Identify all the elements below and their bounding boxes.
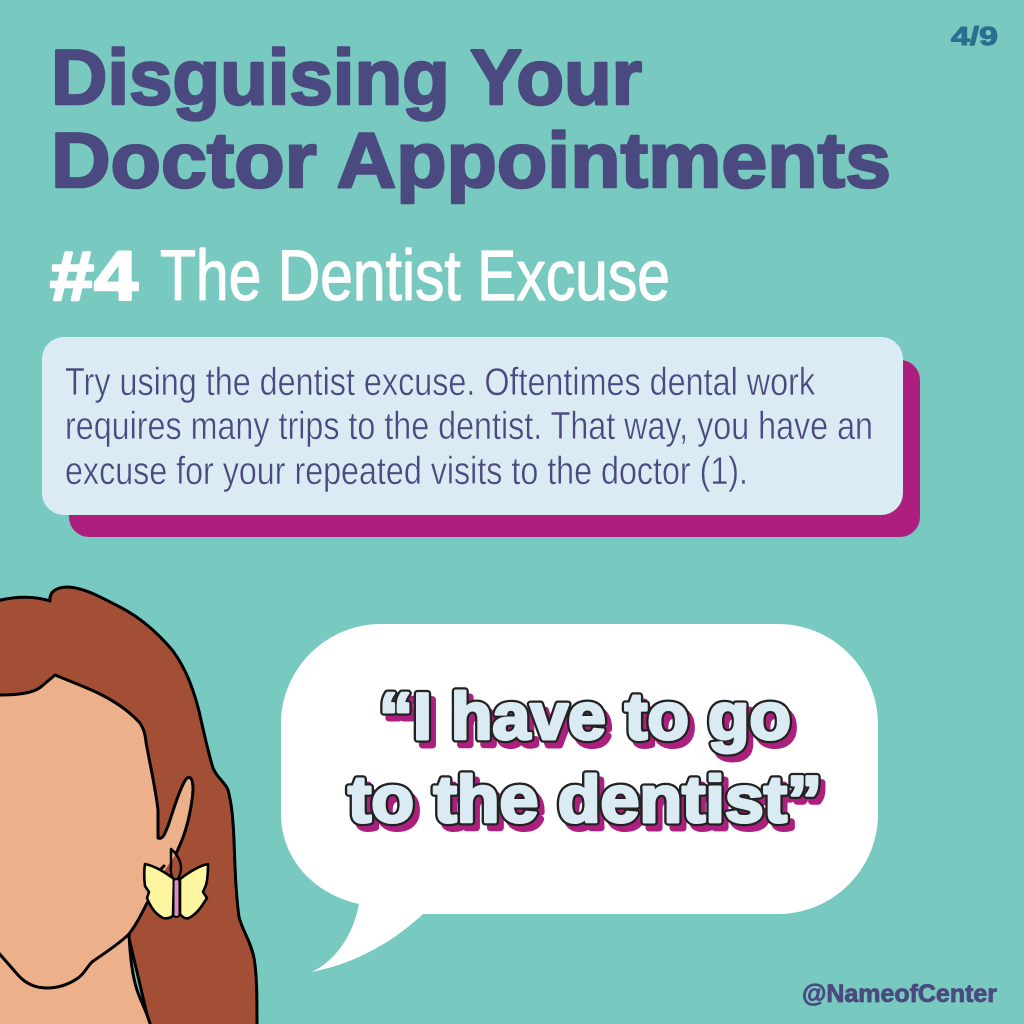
quote outline: “I have to go — [379, 679, 791, 753]
speech bubble — [281, 624, 878, 972]
quote fill — [348, 679, 822, 836]
subtitle: #4 — [50, 237, 138, 315]
hair — [0, 587, 257, 1024]
quote text — [348, 679, 827, 842]
icon: butterfly earring — [144, 849, 208, 918]
title: Doctor Appointments — [51, 116, 891, 204]
quote shadow — [353, 685, 827, 842]
inner hair line — [129, 934, 151, 1024]
quote fill: “I have to go — [379, 679, 791, 753]
quote shadow: “I have to go — [384, 685, 796, 759]
quote fill: to the dentist” — [348, 762, 822, 836]
explanation text: Try using the dentist excuse. Oftentimes dental work — [65, 361, 815, 404]
title: Disguising Your — [51, 33, 642, 121]
page number: 4/9 — [951, 21, 998, 51]
subtitle: The Dentist Excuse — [160, 237, 670, 316]
handle: @NameofCenter — [802, 980, 997, 1008]
explanation text: excuse for your repeated visits to the doctor (1). — [65, 450, 748, 493]
panel: explanation — [42, 337, 920, 537]
title — [51, 33, 891, 204]
explanation text — [65, 361, 873, 493]
quote shadow: to the dentist” — [353, 768, 827, 842]
quote outline — [348, 679, 822, 836]
illustration: woman with butterfly earring — [0, 587, 257, 1024]
explanation text: requires many trips to the dentist. That way, you have an — [65, 405, 873, 448]
face outline — [0, 675, 193, 854]
jaw outline — [0, 866, 164, 988]
face and neck — [0, 675, 193, 1024]
quote outline: to the dentist” — [348, 762, 822, 836]
